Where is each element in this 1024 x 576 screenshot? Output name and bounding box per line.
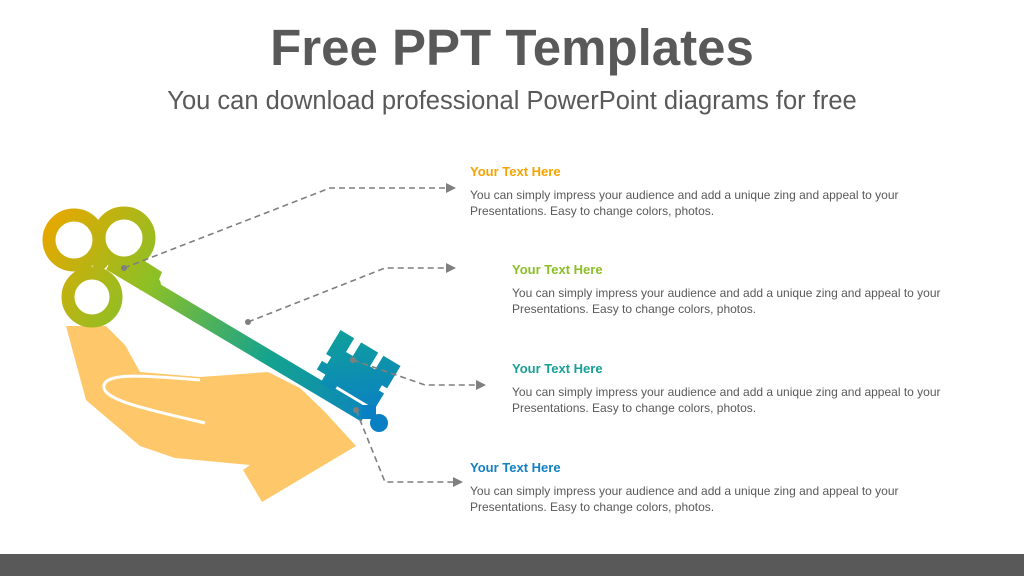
key [49,213,401,432]
text block 1: Your Text Here [470,164,561,179]
text block 2 [512,262,941,316]
text block 4: Your Text Here [470,460,561,475]
text block 3: You can simply impress your audience and add a unique zing and appeal to your Presentations. Easy to change colors, photos. [512,385,941,415]
text block 2: Your Text Here [512,262,603,277]
footer bar [0,554,1024,576]
text block 3: Your Text Here [512,361,603,376]
connector lines [124,188,477,482]
text block 1: You can simply impress your audience and add a unique zing and appeal to your Presentations. Easy to change colors, photos. [470,188,899,218]
title: Free PPT Templates [270,19,754,76]
text block 1 [470,164,899,218]
hand [66,326,356,502]
text block 4: You can simply impress your audience and add a unique zing and appeal to your Presentations. Easy to change colors, photos. [470,484,899,514]
text block 4 [470,460,899,514]
text block 3 [512,361,941,415]
arrowheads and dots [121,183,486,487]
text block 2: You can simply impress your audience and add a unique zing and appeal to your Presentations. Easy to change colors, photos. [512,286,941,316]
subtitle: You can download professional PowerPoint diagrams for free [167,87,857,115]
